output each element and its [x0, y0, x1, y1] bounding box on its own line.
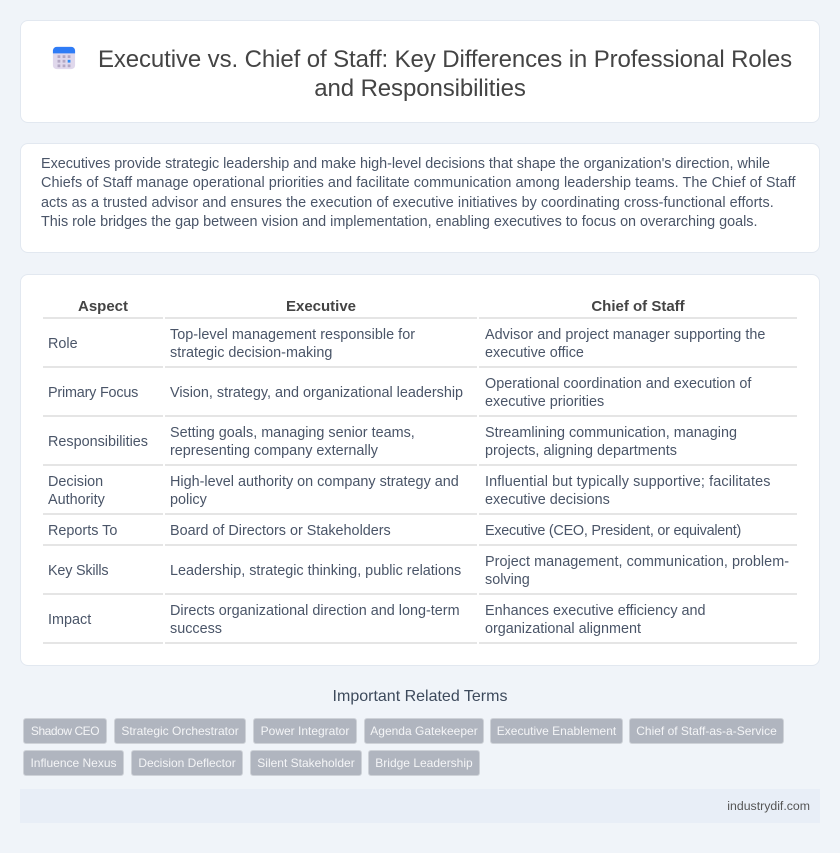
row: Decision Authority: Decision [48, 474, 103, 490]
row: Primary Focus: Primary Focus [48, 385, 138, 401]
related term tags: Power Integrator [261, 724, 349, 738]
row: Role: strategic decision-making [170, 345, 332, 361]
row: Primary Focus: executive priorities [485, 394, 604, 410]
row: Impact [48, 603, 706, 637]
row: Decision Authority: High-level authority on company strategy and [170, 474, 459, 490]
intro text: This role bridges the gap between vision and implementation, enabling executives to focus on overarching goals. [41, 214, 757, 230]
row: Impact: organizational alignment [485, 621, 641, 637]
row: Role: executive office [485, 345, 584, 361]
row: Key Skills [48, 554, 789, 588]
related term tags: Bridge Leadership [375, 756, 473, 770]
title: and Responsibilities [314, 75, 526, 102]
related term tags: Executive Enablement [497, 724, 616, 738]
footer source text: industrydif.com [727, 799, 810, 813]
row: Decision Authority: executive decisions [485, 492, 610, 508]
title [98, 46, 792, 102]
row: Key Skills: solving [485, 572, 530, 588]
related term tags: Strategic Orchestrator [121, 724, 239, 738]
row: Primary Focus: Vision, strategy, and organizational leadership [170, 385, 463, 401]
panel: introduction [20, 143, 820, 253]
row: Decision Authority: Authority [48, 492, 105, 508]
row: Primary Focus [48, 376, 752, 410]
row: Responsibilities [48, 425, 737, 459]
row: Role: Top-level management responsible for [170, 327, 415, 343]
panel: header [20, 20, 820, 123]
related term tags [23, 718, 784, 776]
row: Key Skills: Leadership, strategic thinking, public relations [170, 563, 461, 579]
row: Reports To: Reports To [48, 523, 117, 539]
intro text: Executives provide strategic leadership and make high-level decisions that shape the organization's direction, while [41, 156, 770, 172]
row: Decision Authority [48, 474, 771, 508]
panel: comparison table [20, 274, 820, 666]
row: Responsibilities: Responsibilities [48, 434, 148, 450]
row: Responsibilities: Streamlining communication, managing [485, 425, 737, 441]
row: Impact: success [170, 621, 222, 637]
related term tags: Influence Nexus [30, 756, 117, 770]
row: Key Skills: Key Skills [48, 563, 108, 579]
row: Reports To [48, 523, 741, 539]
row: Reports To: Executive (CEO, President, or equivalent) [485, 523, 741, 539]
related term tags: Decision Deflector [138, 756, 236, 770]
row: Impact: Impact [48, 612, 91, 628]
related term tags: Chief of Staff-as-a-Service [636, 724, 777, 738]
title: Executive vs. Chief of Staff: Key Differences in Professional Roles [98, 46, 792, 73]
row: Decision Authority: policy [170, 492, 207, 508]
row: Primary Focus: Operational coordination and execution of [485, 376, 751, 392]
intro text [41, 156, 796, 230]
table header row [78, 298, 685, 315]
row: Responsibilities: representing company externally [170, 443, 378, 459]
footer bar [20, 789, 820, 823]
row: Reports To: Board of Directors or Stakeholders [170, 523, 391, 539]
related term tags: Silent Stakeholder [257, 756, 355, 770]
row: Responsibilities: projects, aligning departments [485, 443, 677, 459]
intro text: acts as a trusted advisor and ensures the execution of executive initiatives by coordinating cross-functional efforts. [41, 195, 774, 211]
table header row: Executive [286, 298, 356, 315]
related term tags: Shadow CEO [31, 724, 99, 738]
table header row: Aspect [78, 298, 128, 315]
heading: related terms: Important Related Terms [333, 688, 507, 705]
row: Responsibilities: Setting goals, managing senior teams, [170, 425, 415, 441]
related term tags: Agenda Gatekeeper [370, 724, 478, 738]
row: Role [48, 327, 765, 361]
row: Key Skills: Project management, communication, problem- [485, 554, 789, 570]
intro text: Chiefs of Staff manage operational priorities and facilitate communication among leadership teams. The Chief of Staff [41, 175, 796, 191]
row: Role: Advisor and project manager supporting the [485, 327, 765, 343]
row: Decision Authority: Influential but typically supportive; facilitates [485, 474, 771, 490]
row: Impact: Enhances executive efficiency and [485, 603, 706, 619]
row: Role: Role [48, 336, 78, 352]
row: Impact: Directs organizational direction and long-term [170, 603, 460, 619]
table header row: Chief of Staff [591, 298, 685, 315]
icon: calendar [52, 46, 76, 70]
